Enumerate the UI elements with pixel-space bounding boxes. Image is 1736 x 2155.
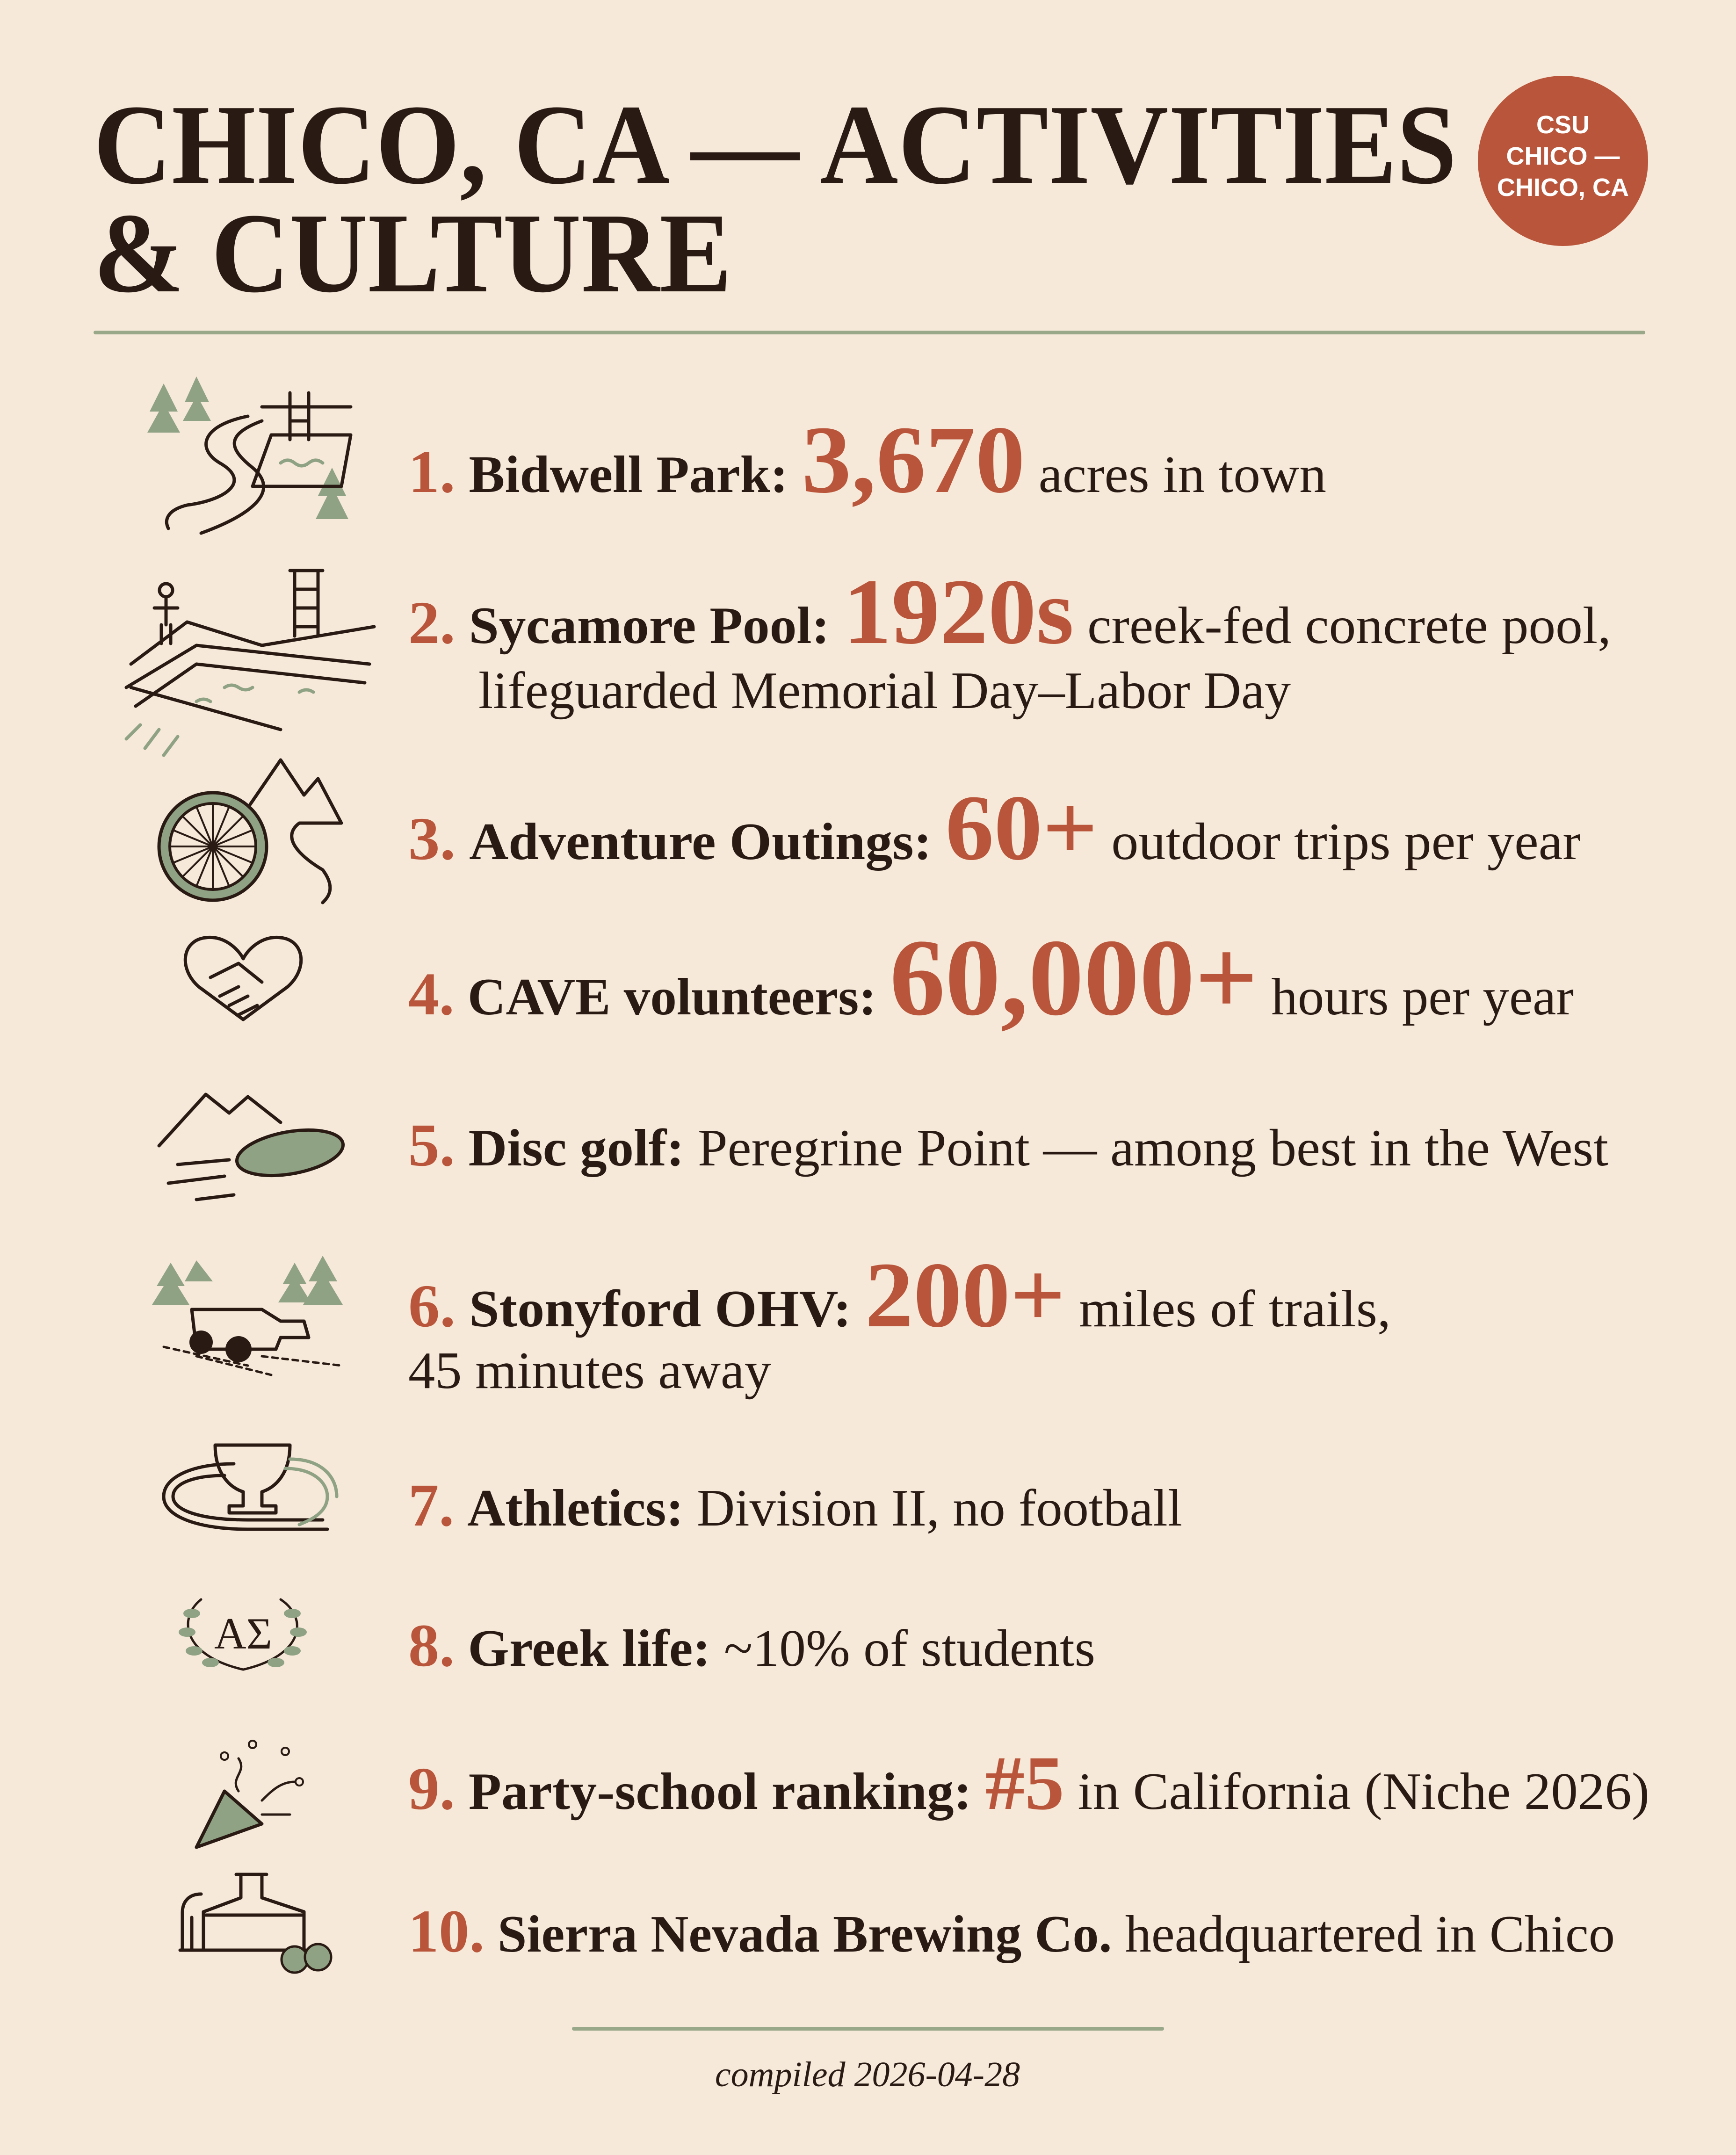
text: row 10: 10. Sierra Nevada Brewing Co. headquartered in Chico [408, 1898, 1615, 1965]
text: row 8: 8. Greek life: ~10% of students [408, 1612, 1095, 1679]
text: row 6: 6. Stonyford OHV: 200+ miles of trails, [408, 1244, 1391, 1347]
icon: bike wheel mountains [159, 760, 341, 903]
icon: greek laurel: ΑΣ [214, 1609, 272, 1658]
icon: heart handshake [185, 937, 301, 1020]
icon: disc golf frisbee [159, 1094, 347, 1200]
text: row 4: 4. CAVE volunteers: 60,000+ hours per year [408, 917, 1574, 1038]
icon: jeep with trees [152, 1256, 343, 1375]
text: row 5: 5. Disc golf: Peregrine Point — among best in the West [408, 1112, 1608, 1179]
badge: CSU Chico [1478, 76, 1648, 246]
icon: park river pool trees [147, 376, 351, 533]
icon: greek laurel [179, 1599, 307, 1670]
badge: CSU Chico: CHICO, CA [1497, 174, 1629, 202]
icon: pool with lifeguard [126, 571, 374, 755]
badge: CSU Chico: CHICO — [1506, 142, 1620, 170]
text: row 7: 7. Athletics: Division II, no football [408, 1472, 1182, 1539]
text: row 2: lifeguarded Memorial Day–Labor Day [478, 662, 1291, 720]
title [94, 81, 1457, 316]
text: row 2 [408, 560, 1611, 720]
title: & CULTURE [94, 190, 732, 316]
badge: CSU Chico: CSU [1536, 111, 1590, 139]
icon: party popper [196, 1741, 303, 1847]
text: row 2: 2. Sycamore Pool: 1920s creek-fed concrete pool, [408, 560, 1611, 664]
title: CHICO, CA — ACTIVITIES [94, 81, 1457, 208]
footer: compiled 2026-04-28 [715, 2055, 1020, 2094]
text: row 6 [408, 1244, 1391, 1400]
text: row 6: 45 minutes away [408, 1342, 771, 1400]
text: row 1: 1. Bidwell Park: 3,670 acres in town [408, 406, 1326, 513]
text: row 3: 3. Adventure Outings: 60+ outdoor trips per year [408, 776, 1581, 880]
icon: trophy and track [164, 1445, 337, 1529]
text: row 9: 9. Party-school ranking: #5 in California (Niche 2026) [408, 1740, 1649, 1826]
icon: brewery kettle and hops [180, 1874, 331, 1973]
